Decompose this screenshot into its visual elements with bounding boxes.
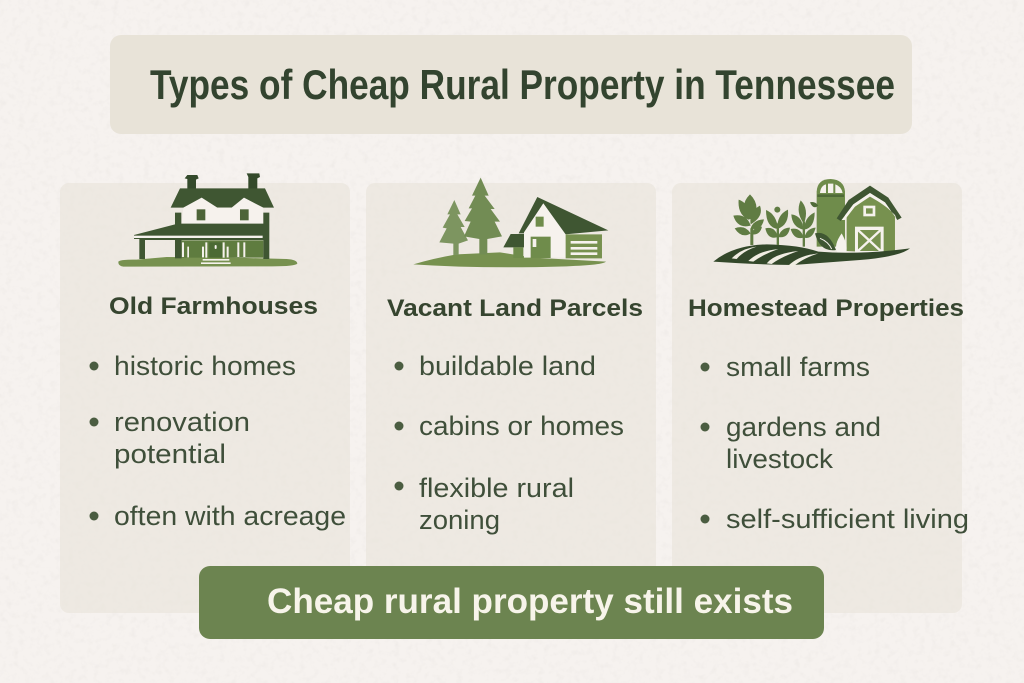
callout text: Cheap rural property still exists xyxy=(267,582,793,621)
list: land features: cabins or homes xyxy=(419,411,624,441)
icon: farmhouse xyxy=(118,173,297,267)
list: land features: buildable land xyxy=(419,351,596,381)
crops xyxy=(733,194,816,247)
list: homestead features: livestock xyxy=(726,444,834,474)
list: homestead features xyxy=(700,352,969,534)
heading: Vacant Land Parcels xyxy=(387,295,643,322)
heading: Old Farmhouses xyxy=(109,293,318,320)
list: homestead features: self-sufficient living xyxy=(726,504,969,534)
panel: homestead properties xyxy=(672,179,969,613)
list: homestead features: gardens and xyxy=(726,412,881,442)
panel: old farmhouses xyxy=(60,173,350,613)
list: land features xyxy=(394,351,624,535)
list: farmhouse features: potential xyxy=(114,439,226,469)
panel: vacant land parcels xyxy=(366,178,656,613)
list: land features: zoning xyxy=(419,505,500,535)
title: Types of Cheap Rural Property in Tennessee xyxy=(150,61,895,108)
heading: Homestead Properties xyxy=(688,295,964,322)
list: homestead features: small farms xyxy=(726,352,870,382)
list: land features: flexible rural xyxy=(419,473,574,503)
icon: trees and cabin xyxy=(413,178,608,267)
list: farmhouse features xyxy=(90,351,346,531)
list: farmhouse features: renovation xyxy=(114,407,250,437)
list: farmhouse features: historic homes xyxy=(114,351,296,381)
callout banner xyxy=(199,566,824,639)
icon: barn, silo and crops xyxy=(713,179,910,267)
list: farmhouse features: often with acreage xyxy=(114,501,346,531)
title banner xyxy=(110,35,912,134)
